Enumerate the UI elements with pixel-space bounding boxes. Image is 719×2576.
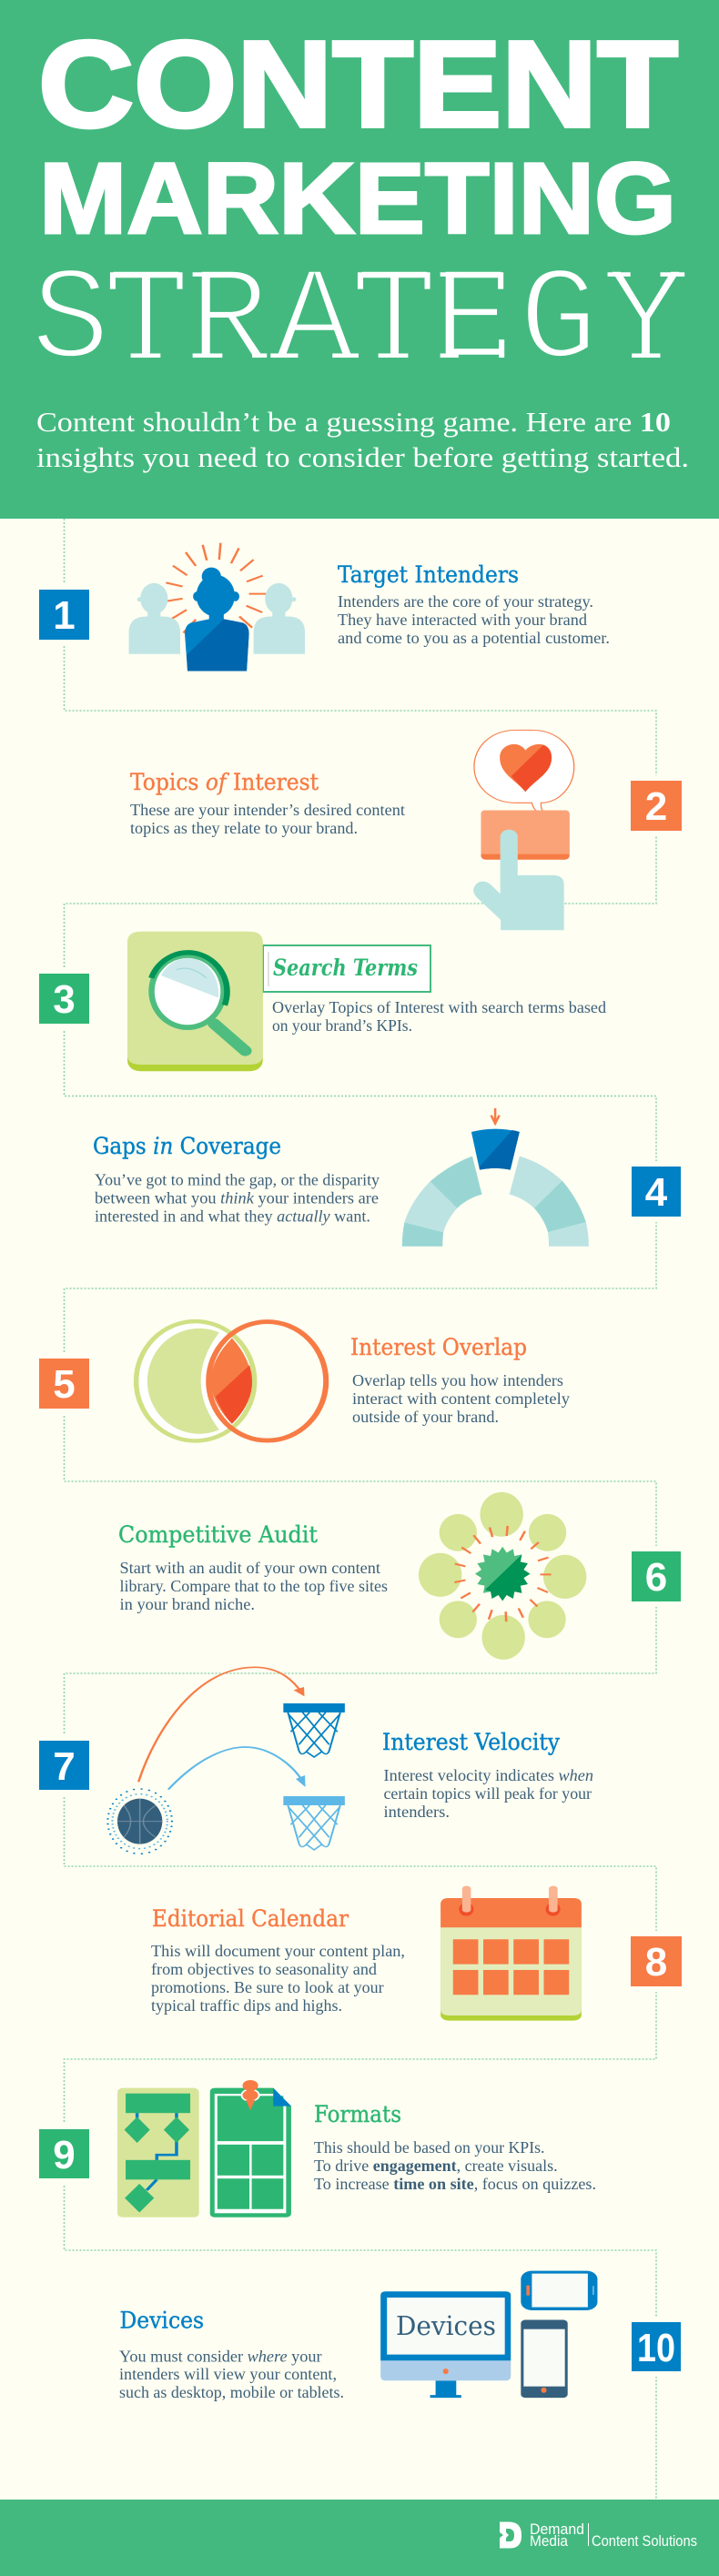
badge 3	[39, 968, 89, 1029]
panel: step 3 search terms	[39, 932, 606, 1071]
badge 9	[39, 2124, 89, 2184]
logo: Demand Media Content Solutions: Content Solutions	[592, 2532, 697, 2550]
badge 8: 8	[645, 1940, 667, 1985]
logo: Demand Media Content Solutions: Demand	[530, 2520, 584, 2538]
heading: Devices	[120, 2308, 204, 2333]
badge 1: 1	[53, 593, 76, 638]
panel: step 6 competitive audit	[118, 1492, 681, 1660]
body text: interact with content completely	[352, 1389, 570, 1408]
heading: Competitive Audit	[118, 1521, 318, 1548]
icon: people with rays	[129, 543, 305, 671]
body text: promotions. Be sure to look at your	[151, 1978, 384, 1996]
icon: flowchart and pinned page	[117, 2080, 291, 2217]
body text: You must consider where your	[119, 2348, 322, 2366]
body text: Start with an audit of your own content	[120, 1559, 380, 1577]
body text: Interest velocity indicates when	[384, 1766, 593, 1784]
heading: Target Intenders	[338, 561, 519, 588]
body text	[95, 1170, 380, 1225]
body text: between what you think your intenders are	[95, 1188, 379, 1207]
body text	[151, 1942, 405, 2015]
heading: Formats	[314, 2101, 401, 2127]
body text: Overlap tells you how intenders	[352, 1371, 563, 1389]
badge 5	[39, 1353, 89, 1414]
title: CONTENT	[38, 15, 678, 153]
body text	[130, 801, 405, 837]
logo: Demand Media Content Solutions	[500, 2520, 697, 2550]
icon: venn overlap	[137, 1321, 326, 1441]
body text: typical traffic dips and highs.	[151, 1996, 342, 2015]
badge 2	[631, 775, 682, 836]
panel: step 7 interest velocity	[39, 1667, 593, 1854]
body text: To drive engagement, create visuals.	[314, 2157, 558, 2175]
badge 6: 6	[645, 1555, 667, 1600]
body text	[314, 2138, 596, 2193]
icon: petals and starburst	[419, 1492, 586, 1660]
badge 1	[39, 584, 89, 645]
body text: Overlay Topics of Interest with search terms based	[272, 998, 606, 1016]
body text	[338, 592, 610, 647]
body text	[384, 1766, 593, 1821]
body text: intenders.	[384, 1803, 450, 1821]
body text	[120, 1559, 388, 1613]
icon: arc gauge	[402, 1108, 589, 1247]
panel: step 5 interest overlap	[39, 1321, 570, 1441]
body text: These are your intender’s desired content	[130, 801, 405, 819]
panel: step 2 topics of interest	[130, 730, 682, 930]
body text: such as desktop, mobile or tablets.	[119, 2383, 344, 2401]
badge 5: 5	[53, 1362, 76, 1407]
basketball	[107, 1789, 172, 1854]
badge 4	[632, 1161, 681, 1222]
heading: Topics of Interest	[130, 769, 319, 795]
body text: in your brand niche.	[120, 1595, 255, 1613]
body text: on your brand’s KPIs.	[272, 1016, 412, 1035]
tagline: insights you need to consider before getting started.	[36, 441, 689, 473]
panel: step 1 target intenders	[39, 543, 610, 671]
title: MARKETING	[39, 143, 676, 255]
panel: step 8 editorial calendar	[151, 1886, 682, 2021]
heading: Gaps in Coverage	[93, 1133, 281, 1159]
body text: You’ve got to mind the gap, or the disparity	[95, 1170, 380, 1188]
body text: interested in and what they actually want.	[95, 1207, 370, 1225]
badge 6	[632, 1546, 681, 1607]
body text	[272, 998, 606, 1035]
header panel	[0, 0, 719, 519]
hoop: blue	[283, 1703, 345, 1757]
icon: monitor, phones	[380, 2271, 597, 2398]
tagline: Content shouldn’t be a guessing game. Here are 10	[36, 406, 671, 438]
heading: Interest Overlap	[350, 1334, 527, 1360]
body text: To increase time on site, focus on quizzes.	[314, 2175, 596, 2193]
body text: topics as they relate to your brand.	[130, 819, 358, 837]
body text: and come to you as a potential customer.	[338, 629, 610, 647]
badge 4: 4	[645, 1170, 668, 1215]
icon: heart bubble and pointing hand	[473, 730, 574, 930]
badge 10	[632, 2317, 681, 2377]
badge 2: 2	[645, 784, 667, 829]
tagline	[36, 406, 689, 473]
body text	[352, 1371, 570, 1426]
body text: library. Compare that to the top five sites	[120, 1577, 388, 1595]
badge 8	[631, 1931, 682, 1992]
badge 10: 10	[637, 2326, 675, 2370]
arrow: orange arc	[138, 1667, 305, 1782]
body text: outside of your brand.	[352, 1408, 499, 1426]
panel: step 4 gaps in coverage	[93, 1108, 681, 1247]
footer	[0, 2500, 719, 2576]
body text: This should be based on your KPIs.	[314, 2138, 544, 2157]
badge 7: 7	[53, 1744, 76, 1789]
search box heading: Search Terms	[273, 955, 418, 981]
body text: certain topics will peak for your	[384, 1784, 592, 1803]
heading: Editorial Calendar	[152, 1905, 349, 1932]
icon: basketball and hoops	[107, 1667, 345, 1854]
title	[31, 15, 685, 397]
badge 9: 9	[53, 2133, 76, 2177]
search box heading	[263, 945, 430, 992]
body text	[119, 2348, 344, 2401]
panel: step 10 devices	[119, 2271, 681, 2401]
icon: monitor, phones: Devices	[396, 2310, 496, 2341]
body text: This will document your content plan,	[151, 1942, 405, 1960]
arrow: blue arc	[168, 1747, 306, 1790]
heading: Interest Velocity	[382, 1729, 561, 1755]
icon: calendar	[441, 1886, 582, 2021]
body text: from objectives to seasonality and	[151, 1960, 377, 1978]
body text: Intenders are the core of your strategy.	[338, 592, 593, 611]
logo: Demand Media Content Solutions: Media	[530, 2532, 568, 2550]
badge 7	[39, 1735, 89, 1796]
body text: They have interacted with your brand	[338, 611, 587, 629]
panel: step 9 formats	[39, 2080, 596, 2217]
body text: intenders will view your content,	[119, 2365, 337, 2383]
badge 3: 3	[53, 977, 76, 1022]
title: STRATEGY	[31, 247, 685, 397]
icon: magnifying glass card	[127, 932, 263, 1071]
hoop: light blue	[283, 1796, 345, 1850]
